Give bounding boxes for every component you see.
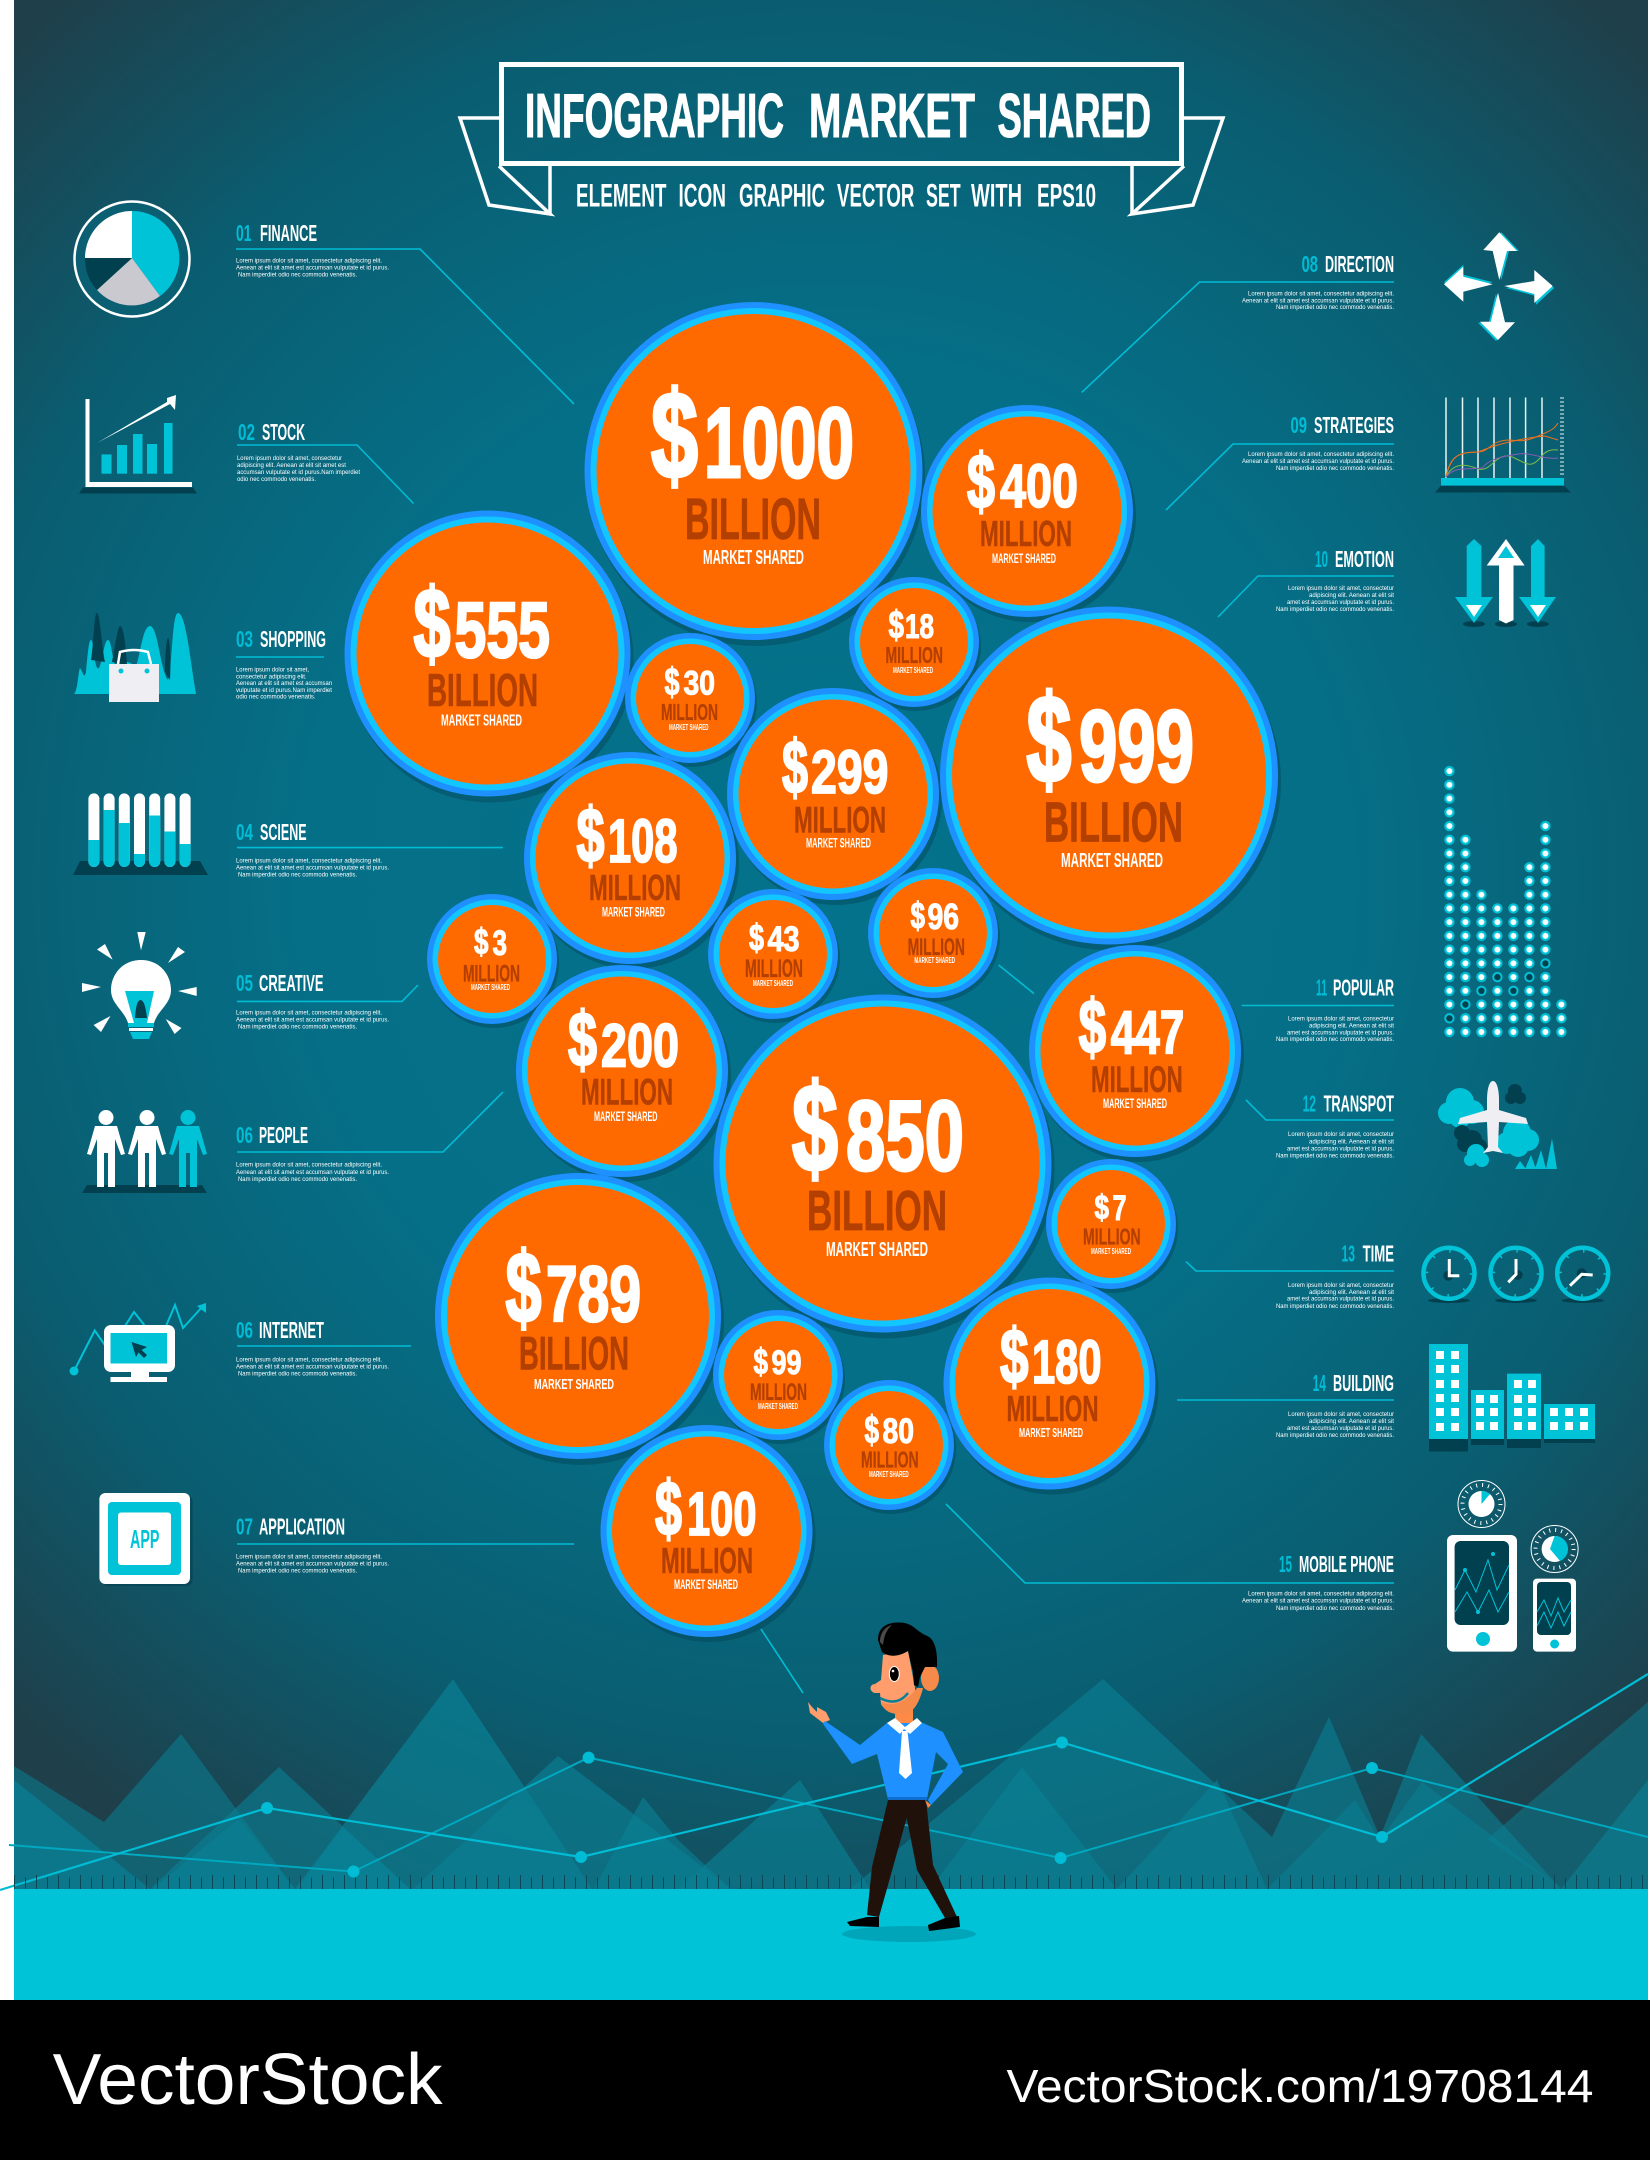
bubble: $200 million	[516, 965, 731, 1182]
bubble: $30 million: 30	[684, 664, 715, 702]
connector: $100 to presenter	[761, 1629, 803, 1693]
bubble: $18 million: MILLION	[886, 642, 943, 668]
icon: mobile phones	[1447, 1480, 1578, 1652]
icon: dot column chart	[1441, 764, 1569, 1039]
label: 12 transport: 12	[1303, 1090, 1316, 1116]
label: 12 transport: Nam imperdiet odio nec commodo venenatis.	[1276, 1152, 1394, 1160]
label: 07 application	[236, 1514, 574, 1574]
label: 10 emotion: amet est accumsan vulputate et id purus.	[1287, 599, 1394, 606]
bubble: $850 billion: $	[792, 1060, 838, 1198]
label: 04 science: Nam imperdiet odio nec commodo venenatis.	[238, 872, 357, 878]
title banner: GRAPHIC	[739, 178, 825, 214]
label: 06 people: Aenean at elit sit amet est accumsan vulputate et id purus.	[236, 1169, 389, 1176]
bubble: $99 million: MILLION	[750, 1379, 807, 1406]
label: 06 people: Lorem ipsum dolor sit amet, consectetur adipiscing elit.	[236, 1162, 382, 1168]
label: 06 internet: INTERNET	[259, 1317, 324, 1343]
bubble: $96 million: MILLION	[908, 934, 965, 961]
label: 14 building	[1177, 1370, 1395, 1439]
label: 09 strategies: STRATEGIES	[1314, 412, 1394, 438]
bubble: $789 billion: 789	[546, 1249, 641, 1338]
bubble: $7 million: $	[1094, 1189, 1109, 1227]
bubble: $43 million	[708, 889, 840, 1023]
bubble: $3 million: 3	[492, 924, 507, 963]
bubble: $96 million	[868, 868, 1000, 1002]
icon: pie chart	[74, 202, 190, 316]
bubble: $400 million: $	[967, 439, 995, 525]
title banner: VECTOR	[837, 178, 914, 214]
label: 12 transport: Lorem ipsum dolor sit amet, consectetur	[1288, 1131, 1395, 1138]
label: 10 emotion: 10	[1315, 546, 1328, 572]
label: 08 direction: Nam imperdiet odio nec commodo venenatis.	[1276, 304, 1394, 311]
icon: shopping bag and peaks	[74, 613, 196, 702]
bubble: $789 billion: MARKET SHARED	[534, 1376, 614, 1393]
bubble: $200 million: MILLION	[581, 1072, 673, 1113]
bubble: $299 million: $	[782, 725, 808, 809]
icon: light bulb	[82, 932, 197, 1039]
bubble: $18 million	[849, 577, 981, 711]
label: 09 strategies: 09	[1290, 412, 1307, 438]
title banner: EPS10	[1037, 178, 1096, 214]
label: 14 building: BUILDING	[1333, 1370, 1394, 1396]
icon: airplane and clouds	[1438, 1081, 1557, 1169]
label: 09 strategies: Lorem ipsum dolor sit amet, consectetur adipiscing elit.	[1248, 451, 1394, 458]
label: 07 application: 07	[236, 1514, 253, 1540]
label: 04 science: 04	[236, 819, 253, 845]
label: 03 shopping: consectetur adipiscing elit.	[236, 674, 307, 680]
bubble: $1000 billion: MARKET SHARED	[703, 547, 804, 569]
bubble: $80 million: 80	[882, 1412, 914, 1451]
footer bar: VectorStock.com/19708144	[1006, 2060, 1594, 2112]
bubble: $7 million: MARKET SHARED	[1091, 1247, 1131, 1256]
bubble: $30 million: MARKET SHARED	[669, 722, 708, 732]
bubble: $447 million: MARKET SHARED	[1103, 1096, 1167, 1111]
label: 03 shopping	[236, 626, 332, 700]
bubble: $180 million: $	[1000, 1314, 1028, 1400]
bubble: $180 million: MILLION	[1006, 1388, 1098, 1429]
bubble: $850 billion: MARKET SHARED	[826, 1239, 928, 1261]
icon: application	[99, 1493, 193, 1586]
bubble: $400 million: MARKET SHARED	[992, 550, 1056, 566]
icon: clocks	[1424, 1248, 1608, 1303]
label: 01 finance: FINANCE	[260, 220, 317, 246]
label: 07 application: Aenean at elit sit amet est accumsan vulputate et id purus.	[236, 1560, 389, 1568]
bubble: $180 million: MARKET SHARED	[1019, 1426, 1083, 1440]
label: 09 strategies: Nam imperdiet odio nec commodo venenatis.	[1276, 465, 1394, 472]
label: 05 creative: Nam imperdiet odio nec commodo venenatis.	[238, 1024, 357, 1030]
bubble: $1000 billion	[584, 302, 925, 646]
bubble: $80 million: MARKET SHARED	[869, 1469, 909, 1479]
label: 05 creative: 05	[236, 970, 253, 996]
bubble: $18 million: $	[888, 604, 904, 647]
bubble: $30 million	[625, 633, 757, 767]
bubble: $108 million: MARKET SHARED	[602, 904, 665, 920]
label: 11 popular: POPULAR	[1333, 974, 1394, 1000]
bubble: $99 million: 99	[772, 1344, 802, 1382]
bubble: $850 billion	[714, 994, 1054, 1338]
icon: people	[82, 1110, 207, 1193]
label: 02 stock: Lorem ipsum dolor sit amet, consectetur	[237, 455, 343, 462]
label: 11 popular: Nam imperdiet odio nec commodo venenatis.	[1276, 1036, 1394, 1043]
label: 13 time: Lorem ipsum dolor sit amet, consectetur	[1288, 1282, 1395, 1289]
label: 13 time: 13	[1342, 1241, 1355, 1267]
label: 05 creative: Lorem ipsum dolor sit amet, consectetur adipiscing elit.	[236, 1010, 382, 1016]
label: 13 time	[1186, 1241, 1395, 1310]
label: 03 shopping: SHOPPING	[260, 626, 326, 652]
label: 10 emotion: Lorem ipsum dolor sit amet, consectetur	[1288, 585, 1395, 592]
label: 09 strategies	[1166, 412, 1394, 510]
bubble: $1000 billion: $	[651, 368, 698, 505]
bubble: $100 million: $	[655, 1466, 682, 1552]
label: 06 people: PEOPLE	[259, 1122, 308, 1148]
bubble: $447 million	[1029, 945, 1244, 1162]
label: 10 emotion: EMOTION	[1335, 546, 1394, 572]
mountain landscape	[14, 1679, 1648, 1889]
bubble: $18 million: MARKET SHARED	[893, 666, 933, 675]
label: 06 internet	[236, 1317, 411, 1378]
bubble: $108 million: $	[576, 793, 604, 879]
label: 02 stock: STOCK	[262, 419, 305, 445]
icon: emotion arrows	[1455, 539, 1556, 627]
label: 04 science: SCIENE	[260, 819, 307, 845]
label: 13 time: amet est accumsan vulputate et id purus.	[1287, 1296, 1394, 1302]
bubble: $96 million: 96	[928, 896, 959, 937]
label: 09 strategies: Aenean at elit sit amet est accumsan vulputate et id purus.	[1242, 458, 1394, 465]
label: 11 popular: 11	[1316, 974, 1327, 1000]
bubble: $999 billion	[940, 606, 1281, 950]
label: 04 science: Lorem ipsum dolor sit amet, consectetur adipiscing elit.	[236, 858, 382, 864]
label: 14 building: adipiscing elit. Aenean at elit sit	[1309, 1418, 1394, 1425]
bubble: $299 million	[727, 688, 942, 905]
bubble: $99 million: MARKET SHARED	[758, 1402, 798, 1411]
bubble: $80 million: $	[864, 1409, 879, 1452]
label: 15 mobile phone: Nam imperdiet odio nec commodo venenatis.	[1276, 1605, 1394, 1612]
bubble: $555 billion: MARKET SHARED	[441, 712, 522, 730]
label: 01 finance: 01	[236, 220, 252, 246]
label: 15 mobile phone: MOBILE PHONE	[1299, 1551, 1394, 1577]
icon: direction arrows	[1444, 232, 1554, 341]
label: 05 creative: CREATIVE	[259, 970, 324, 996]
bubble: $999 billion: MARKET SHARED	[1061, 850, 1163, 872]
label: 07 application: Lorem ipsum dolor sit amet, consectetur adipiscing elit.	[236, 1554, 382, 1560]
label: 03 shopping: odio nec commodo venenatis.	[236, 694, 316, 700]
bubble: $3 million: MARKET SHARED	[471, 983, 510, 992]
label: 14 building: Lorem ipsum dolor sit amet, consectetur	[1288, 1411, 1395, 1418]
label: 13 time: adipiscing elit. Aenean at elit sit	[1309, 1289, 1394, 1296]
title banner: WITH	[971, 178, 1022, 214]
bubble: $7 million	[1046, 1159, 1178, 1293]
label: 03 shopping: 03	[236, 626, 253, 652]
label: 01 finance	[236, 220, 574, 404]
label: 11 popular: amet est accumsan vulputate et id purus.	[1287, 1030, 1394, 1036]
label: 14 building: amet est accumsan vulputate et id purus.	[1287, 1425, 1394, 1432]
bubble: $100 million: 100	[687, 1480, 756, 1548]
presenter character	[808, 1622, 976, 1942]
label: 08 direction	[1082, 251, 1394, 392]
bubble: $43 million: MARKET SHARED	[753, 978, 793, 988]
title banner	[460, 64, 1223, 214]
label: 10 emotion	[1218, 546, 1395, 617]
icon: internet monitor	[70, 1303, 206, 1382]
bubble: $400 million: 400	[1000, 452, 1078, 520]
bubble: $108 million: MILLION	[589, 867, 681, 908]
bubble: $100 million	[600, 1425, 816, 1642]
bubble: $7 million: 7	[1112, 1189, 1126, 1228]
bubble: $30 million: $	[664, 661, 680, 704]
icon: stock bar chart	[79, 395, 197, 494]
label: 02 stock	[237, 419, 414, 504]
bubble: $200 million: 200	[601, 1012, 679, 1080]
label: 06 people	[236, 1092, 503, 1183]
bubble: $99 million: $	[754, 1341, 768, 1382]
label: 13 time: TIME	[1363, 1241, 1394, 1267]
bubble: $555 billion: BILLION	[427, 664, 538, 716]
label: 07 application: APPLICATION	[259, 1514, 345, 1540]
bubble: $447 million: MILLION	[1091, 1059, 1183, 1100]
icon: science tubes	[73, 793, 208, 875]
label: 03 shopping: Aenean at elit sit amet est accumsan	[236, 680, 332, 687]
connector: $96 to $447	[999, 965, 1034, 994]
bubble: $100 million: MARKET SHARED	[674, 1577, 738, 1592]
bubble: $7 million: MILLION	[1083, 1224, 1141, 1250]
bubble: $400 million: MILLION	[980, 513, 1072, 554]
label: 12 transport: TRANSPOT	[1324, 1090, 1394, 1116]
label: 13 time: Nam imperdiet odio nec commodo venenatis.	[1276, 1303, 1394, 1310]
title banner: ICON	[678, 178, 726, 214]
label: 04 science	[236, 819, 503, 878]
icon: buildings	[1429, 1344, 1595, 1452]
label: 06 internet: Aenean at elit sit amet est accumsan vulputate et id purus.	[236, 1364, 389, 1370]
bubble: $789 billion: $	[506, 1232, 542, 1344]
bubble: $200 million: $	[568, 997, 597, 1083]
bubble: $850 billion: 850	[846, 1080, 964, 1191]
label: 14 building: 14	[1313, 1370, 1326, 1396]
bubble: $108 million	[524, 752, 739, 969]
bubble: $447 million: $	[1079, 985, 1106, 1070]
bubble: $299 million: MILLION	[794, 800, 886, 840]
label: 12 transport: amet est accumsan vulputate et id purus.	[1287, 1146, 1394, 1152]
label: 08 direction: Lorem ipsum dolor sit amet, consectetur adipiscing elit.	[1248, 290, 1394, 298]
label: 06 people: 06	[236, 1122, 253, 1148]
icon: application: APP	[130, 1524, 159, 1554]
bubble: $850 billion: BILLION	[807, 1179, 947, 1243]
bubble: $200 million: MARKET SHARED	[594, 1109, 658, 1124]
bubble: $80 million	[824, 1380, 956, 1514]
bubble: $30 million: MILLION	[661, 699, 718, 725]
label: 01 finance: Nam imperdiet odio nec commodo venenatis.	[238, 272, 357, 278]
bubble: $299 million: 299	[811, 738, 888, 806]
bubble: $3 million: MILLION	[463, 961, 520, 988]
title banner: ELEMENT	[576, 178, 667, 214]
title banner: MARKET	[809, 82, 975, 151]
label: 08 direction: Aenean at elit sit amet est accumsan vulputate et id purus.	[1242, 298, 1394, 304]
label: 12 transport	[1246, 1090, 1395, 1160]
label: 06 people: Nam imperdiet odio nec commodo venenatis.	[238, 1176, 357, 1183]
bubble: $789 billion	[435, 1173, 724, 1465]
label: 06 internet: Nam imperdiet odio nec commodo venenatis.	[238, 1370, 357, 1378]
bubble: $555 billion: $	[414, 568, 450, 678]
bubble: $99 million	[713, 1310, 845, 1444]
label: 10 emotion: Nam imperdiet odio nec commodo venenatis.	[1276, 606, 1394, 613]
bubble: $180 million: 180	[1032, 1328, 1102, 1396]
bubble: $108 million: 108	[608, 807, 678, 875]
bubble: $1000 billion: BILLION	[685, 487, 821, 552]
bubble: $3 million	[427, 894, 559, 1028]
label: 02 stock: odio nec commodo venenatis.	[237, 476, 316, 483]
ground band	[14, 1889, 1648, 2000]
bubble: $18 million: 18	[905, 608, 934, 646]
title banner: INFOGRAPHIC	[525, 82, 784, 151]
bubble: $100 million: MILLION	[661, 1540, 753, 1581]
label: 10 emotion: adipiscing elit. Aenean at elit sit	[1309, 592, 1394, 599]
bubble: $1000 billion: 1000	[704, 387, 854, 498]
label: 12 transport: adipiscing elit. Aenean at elit sit	[1309, 1138, 1394, 1146]
bubble: $999 billion: $	[1026, 671, 1072, 809]
bubble: $43 million: $	[749, 917, 764, 958]
label: 02 stock: 02	[238, 419, 255, 445]
label: 01 finance: Lorem ipsum dolor sit amet, consectetur adipiscing elit.	[236, 258, 382, 264]
label: 11 popular: adipiscing elit. Aenean at elit sit	[1309, 1022, 1394, 1030]
label: 15 mobile phone: Aenean at elit sit amet est accumsan vulputate et id purus.	[1242, 1598, 1394, 1604]
label: 02 stock: adipiscing elit. Aenean at elit sit amet est	[237, 462, 346, 469]
bubble: $400 million	[921, 405, 1136, 622]
label: 11 popular: Lorem ipsum dolor sit amet, consectetur	[1288, 1016, 1395, 1022]
bubble: $96 million: MARKET SHARED	[914, 956, 955, 965]
label: 15 mobile phone: 15	[1279, 1551, 1292, 1577]
label: 08 direction: 08	[1302, 251, 1318, 277]
bubble: $96 million: $	[910, 895, 925, 936]
bubble: $789 billion: BILLION	[519, 1326, 629, 1380]
bubble: $299 million: MARKET SHARED	[806, 836, 871, 851]
bubble: $999 billion: BILLION	[1044, 791, 1183, 855]
bubble: $80 million: MILLION	[861, 1446, 919, 1472]
bubble: $447 million: 447	[1111, 999, 1184, 1067]
label: 15 mobile phone	[946, 1504, 1394, 1612]
bubble: $43 million: 43	[768, 920, 800, 959]
label: 07 application: Nam imperdiet odio nec commodo venenatis.	[238, 1568, 357, 1574]
label: 05 creative: Aenean at elit sit amet est accumsan vulputate et id purus.	[236, 1016, 389, 1024]
title banner: SHARED	[998, 82, 1151, 151]
label: 02 stock: accumsan vulputate et id purus.Nam imperdiet	[237, 469, 360, 476]
title banner: SET	[926, 178, 961, 214]
label: 06 internet: Lorem ipsum dolor sit amet, consectetur adipiscing elit.	[236, 1356, 382, 1364]
bubble: $43 million: MILLION	[745, 955, 803, 983]
label: 05 creative	[236, 970, 418, 1030]
bubble: $999 billion: 999	[1079, 691, 1194, 803]
label: 11 popular	[1242, 974, 1395, 1043]
bubble: $555 billion: 555	[454, 585, 550, 674]
bubble: $3 million: $	[474, 921, 488, 962]
footer bar	[0, 2000, 1650, 2160]
label: 06 internet: 06	[236, 1317, 253, 1343]
trend line charts	[0, 1674, 1648, 1890]
label: 04 science: Aenean at elit sit amet est accumsan vulputate et id purus.	[236, 864, 389, 872]
icon: strategies line chart	[1435, 398, 1571, 492]
bubble: $555 billion	[344, 510, 634, 802]
label: 01 finance: Aenean at elit sit amet est accumsan vulputate et id purus.	[236, 264, 389, 272]
label: 08 direction: DIRECTION	[1325, 251, 1394, 277]
label: 14 building: Nam imperdiet odio nec commodo venenatis.	[1276, 1432, 1394, 1439]
label: 15 mobile phone: Lorem ipsum dolor sit amet, consectetur adipiscing elit.	[1248, 1590, 1394, 1598]
label: 03 shopping: vulputate et id purus.Nam imperdiet	[236, 687, 332, 694]
label: 03 shopping: Lorem ipsum dolor sit amet,	[236, 666, 309, 674]
footer bar: VectorStock	[53, 2040, 444, 2120]
bubble: $180 million	[944, 1278, 1158, 1494]
